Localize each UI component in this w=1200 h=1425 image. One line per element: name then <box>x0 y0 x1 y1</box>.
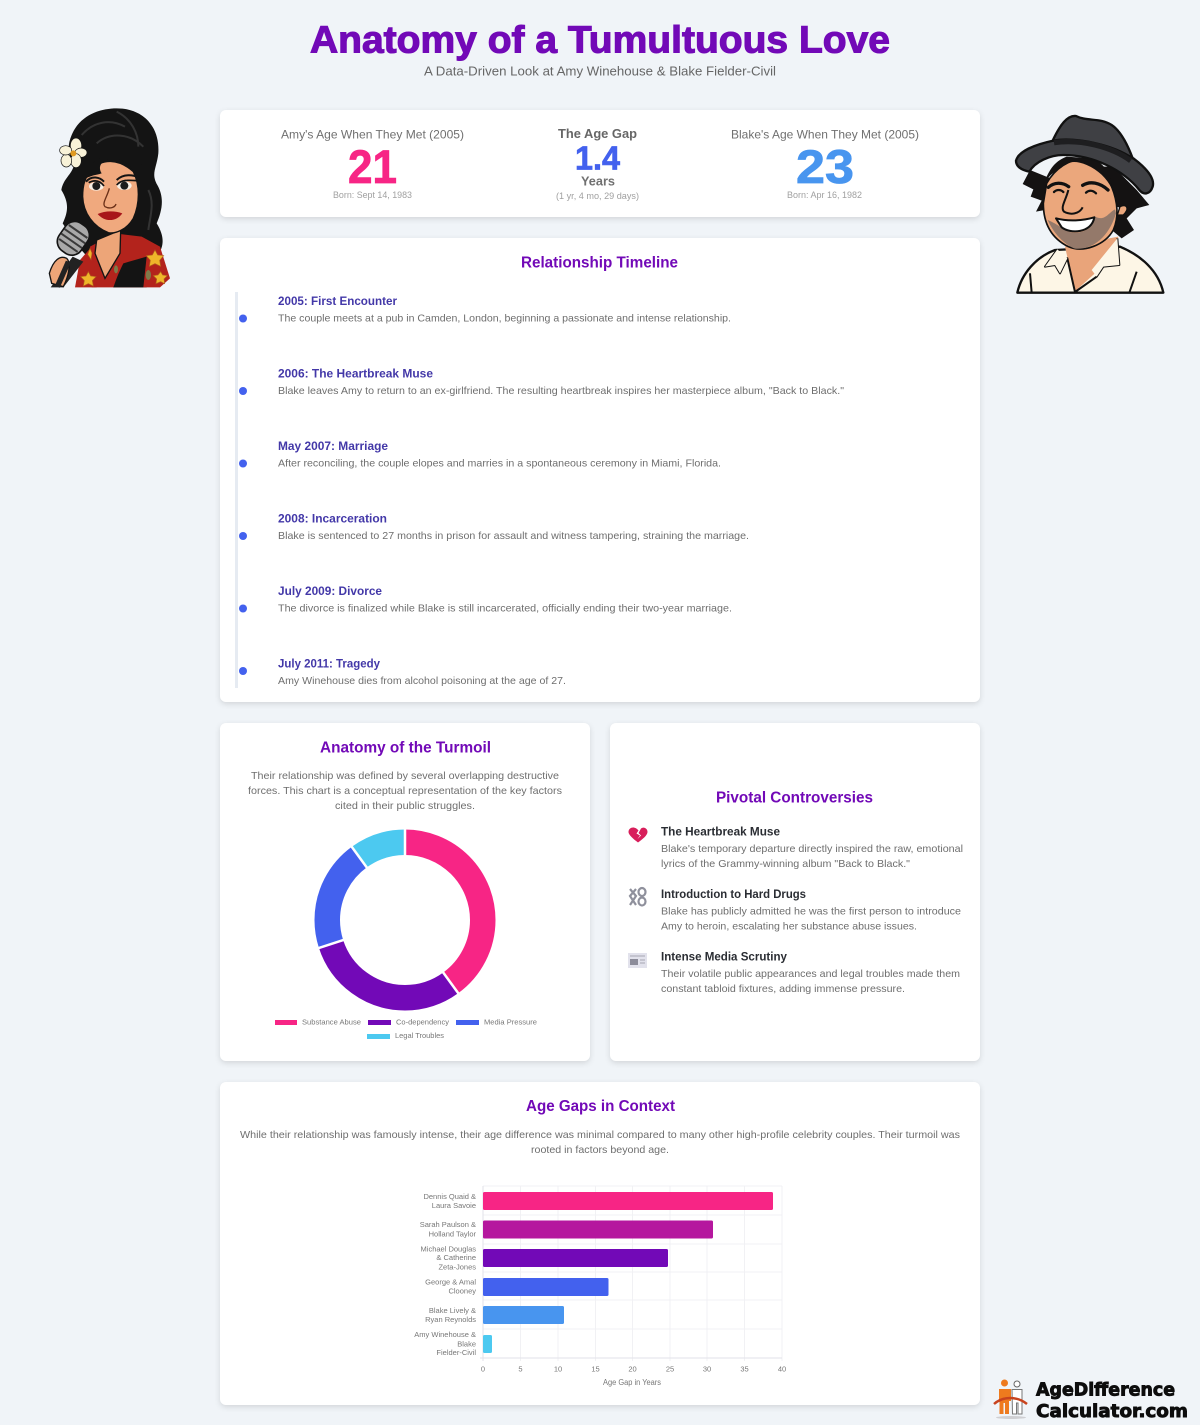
turmoil description: Their relationship was defined by several overlapping destructive <box>251 770 559 782</box>
timeline rail <box>235 292 238 688</box>
age gaps description: rooted in factors beyond age. <box>531 1144 669 1156</box>
face <box>1043 160 1117 249</box>
x axis tick labels: 40 <box>778 1364 786 1374</box>
logo icon: two figures <box>994 1380 1027 1419</box>
y axis labels: George & Amal <box>425 1278 476 1286</box>
turmoil description: cited in their public struggles. <box>335 800 475 812</box>
timeline item 2007 <box>239 441 721 470</box>
title: Anatomy of a Tumultuous Love <box>310 20 890 62</box>
x axis tick labels <box>481 1364 786 1374</box>
stat: Blake's age <box>731 128 919 200</box>
timeline item 2011 <box>239 658 566 687</box>
stat: the age gap: Years <box>581 174 615 188</box>
y axis labels: Fielder-Civil <box>436 1348 476 1357</box>
icon: chains <box>630 888 646 906</box>
stat: Blake's age: 23 <box>796 140 854 193</box>
panel: relationship timeline <box>220 238 980 702</box>
donut chart <box>318 828 483 998</box>
controversy: intense media scrutiny <box>661 952 960 995</box>
y axis labels: Zeta-Jones <box>438 1262 476 1272</box>
x axis tick labels: 10 <box>554 1364 562 1374</box>
panel: age statistics <box>220 110 980 217</box>
y axis labels: Clooney <box>448 1286 476 1296</box>
y axis labels: Blake <box>457 1340 476 1348</box>
stat: Amy's age: Amy's Age When They Met (2005) <box>281 128 464 142</box>
controversy: intense media scrutiny: Their volatile public appearances and legal troubles made them <box>661 968 960 980</box>
timeline item 2008 <box>239 514 749 542</box>
illustration: Blake caricature <box>1016 116 1163 293</box>
y axis labels: Sarah Paulson & <box>420 1220 476 1229</box>
microphone <box>53 217 94 260</box>
timeline item 2007: After reconciling, the couple elopes and marries in a spontaneous ceremony in Miami, Florida. <box>278 458 721 470</box>
timeline item 2009: July 2009: Divorce <box>278 586 382 598</box>
illustration: Amy caricature <box>49 108 170 287</box>
horizontal bar chart <box>414 1186 786 1387</box>
icon: broken heart <box>628 828 648 842</box>
donut legend: Co-dependency <box>396 1018 449 1026</box>
age gaps heading: Age Gaps in Context <box>526 1098 676 1115</box>
timeline item 2011: Amy Winehouse dies from alcohol poisoning at the age of 27. <box>278 675 566 687</box>
timeline item 2006 <box>239 368 844 397</box>
logo: AgeDifferenceCalculator.com: Calculator.com <box>1036 1401 1188 1422</box>
timeline item 2009: The divorce is finalized while Blake is still incarcerated, officially ending their two-year marriage. <box>278 602 732 614</box>
donut legend: Legal Troubles <box>395 1031 444 1040</box>
stat: Blake's age: Born: Apr 16, 1982 <box>787 190 862 200</box>
logo: AgeDifferenceCalculator.com <box>994 1380 1188 1422</box>
timeline item 2005: The couple meets at a pub in Camden, London, beginning a passionate and intense relationship. <box>278 312 731 324</box>
controversy: introduction to hard drugs: Introduction to Hard Drugs <box>661 889 806 901</box>
timeline heading: Relationship Timeline <box>521 254 678 272</box>
controversy: the heartbreak muse: Blake's temporary departure directly inspired the raw, emotional <box>661 843 963 855</box>
logo wordmark: AgeDifference <box>1036 1380 1175 1400</box>
turmoil description <box>248 770 562 812</box>
beard <box>1048 209 1116 249</box>
timeline item 2006: Blake leaves Amy to return to an ex-girlfriend. The resulting heartbreak inspires her masterpiece album, "Back to Black." <box>278 385 844 397</box>
stat: the age gap <box>556 126 639 201</box>
stat: Amy's age: Born: Sept 14, 1983 <box>333 190 412 200</box>
stat: Amy's age: 21 <box>348 140 397 193</box>
y axis labels: Amy Winehouse & <box>414 1330 476 1339</box>
controversy: the heartbreak muse <box>661 826 963 870</box>
turmoil description: forces. This chart is a conceptual representation of the key factors <box>248 785 562 797</box>
age gaps description: While their relationship was famously intense, their age difference was minimal compared to many other high-profile celebrity couples. Their turmoil was <box>240 1129 960 1141</box>
controversy: the heartbreak muse: lyrics of the Grammy-winning album "Back to Black." <box>661 858 910 870</box>
controversies heading: Pivotal Controversies <box>716 790 873 806</box>
controversy: introduction to hard drugs <box>661 889 961 932</box>
timeline item 2006: 2006: The Heartbreak Muse <box>278 368 433 380</box>
x axis tick labels: 25 <box>666 1364 674 1374</box>
stat: Amy's age <box>281 128 464 200</box>
stat: the age gap: The Age Gap <box>558 126 637 141</box>
y axis labels: Ryan Reynolds <box>425 1315 476 1324</box>
stat: the age gap: (1 yr, 4 mo, 29 days) <box>556 191 639 201</box>
bars <box>483 1192 773 1353</box>
donut legend: Substance Abuse <box>302 1018 361 1026</box>
controversy: introduction to hard drugs: Blake has publicly admitted he was the first person to introduce <box>661 906 961 918</box>
controversy: the heartbreak muse: The Heartbreak Muse <box>661 826 780 838</box>
y axis labels <box>414 1192 476 1357</box>
x axis tick labels: 30 <box>703 1364 711 1374</box>
donut legend <box>275 1018 537 1040</box>
panel: pivotal controversies <box>610 723 980 1061</box>
turmoil heading: Anatomy of the Turmoil <box>320 740 491 756</box>
x axis tick labels: 35 <box>740 1364 749 1374</box>
shirt <box>1017 247 1163 293</box>
timeline item 2007: May 2007: Marriage <box>278 441 388 453</box>
panel: anatomy of the turmoil <box>220 723 590 1061</box>
x axis title: Age Gap in Years <box>603 1378 661 1387</box>
x axis tick labels: 0 <box>481 1364 485 1374</box>
timeline item 2005: 2005: First Encounter <box>278 296 398 308</box>
controversy: introduction to hard drugs: Amy to heroin, escalating her substance abuse issues. <box>661 920 917 932</box>
donut legend: Media Pressure <box>484 1018 537 1026</box>
icon: newspaper <box>628 953 647 968</box>
x axis tick labels: 20 <box>628 1364 637 1374</box>
y axis labels: Blake Lively & <box>429 1306 476 1315</box>
y axis labels: & Catherine <box>436 1253 476 1262</box>
y axis labels: Holland Taylor <box>429 1230 476 1238</box>
timeline item 2005 <box>239 296 731 324</box>
timeline item 2008: 2008: Incarceration <box>278 514 387 526</box>
y axis labels: Michael Douglas <box>421 1244 476 1254</box>
fringe <box>1043 157 1112 188</box>
panel: age gaps in context <box>220 1082 980 1405</box>
subtitle: A Data-Driven Look at Amy Winehouse & Blake Fielder-Civil <box>424 64 776 78</box>
hat <box>1016 139 1153 193</box>
hair <box>1023 167 1149 238</box>
flower in hair <box>60 138 87 168</box>
stat: the age gap: 1.4 <box>575 140 621 176</box>
controversy: intense media scrutiny: constant tabloid fixtures, adding immense pressure. <box>661 983 905 995</box>
controversy: intense media scrutiny: Intense Media Scrutiny <box>661 952 788 964</box>
stat: Blake's age: Blake's Age When They Met (2005) <box>731 128 919 142</box>
y axis labels: Laura Savoie <box>432 1201 476 1210</box>
age gaps description <box>240 1129 960 1156</box>
timeline item 2009 <box>239 586 732 614</box>
timeline item 2011: July 2011: Tragedy <box>278 658 381 670</box>
x axis tick labels: 15 <box>591 1364 600 1374</box>
x axis tick labels: 5 <box>518 1364 523 1374</box>
y axis labels: Dennis Quaid & <box>423 1192 476 1201</box>
timeline item 2008: Blake is sentenced to 27 months in prison for assault and witness tampering, straining the marriage. <box>278 530 749 542</box>
